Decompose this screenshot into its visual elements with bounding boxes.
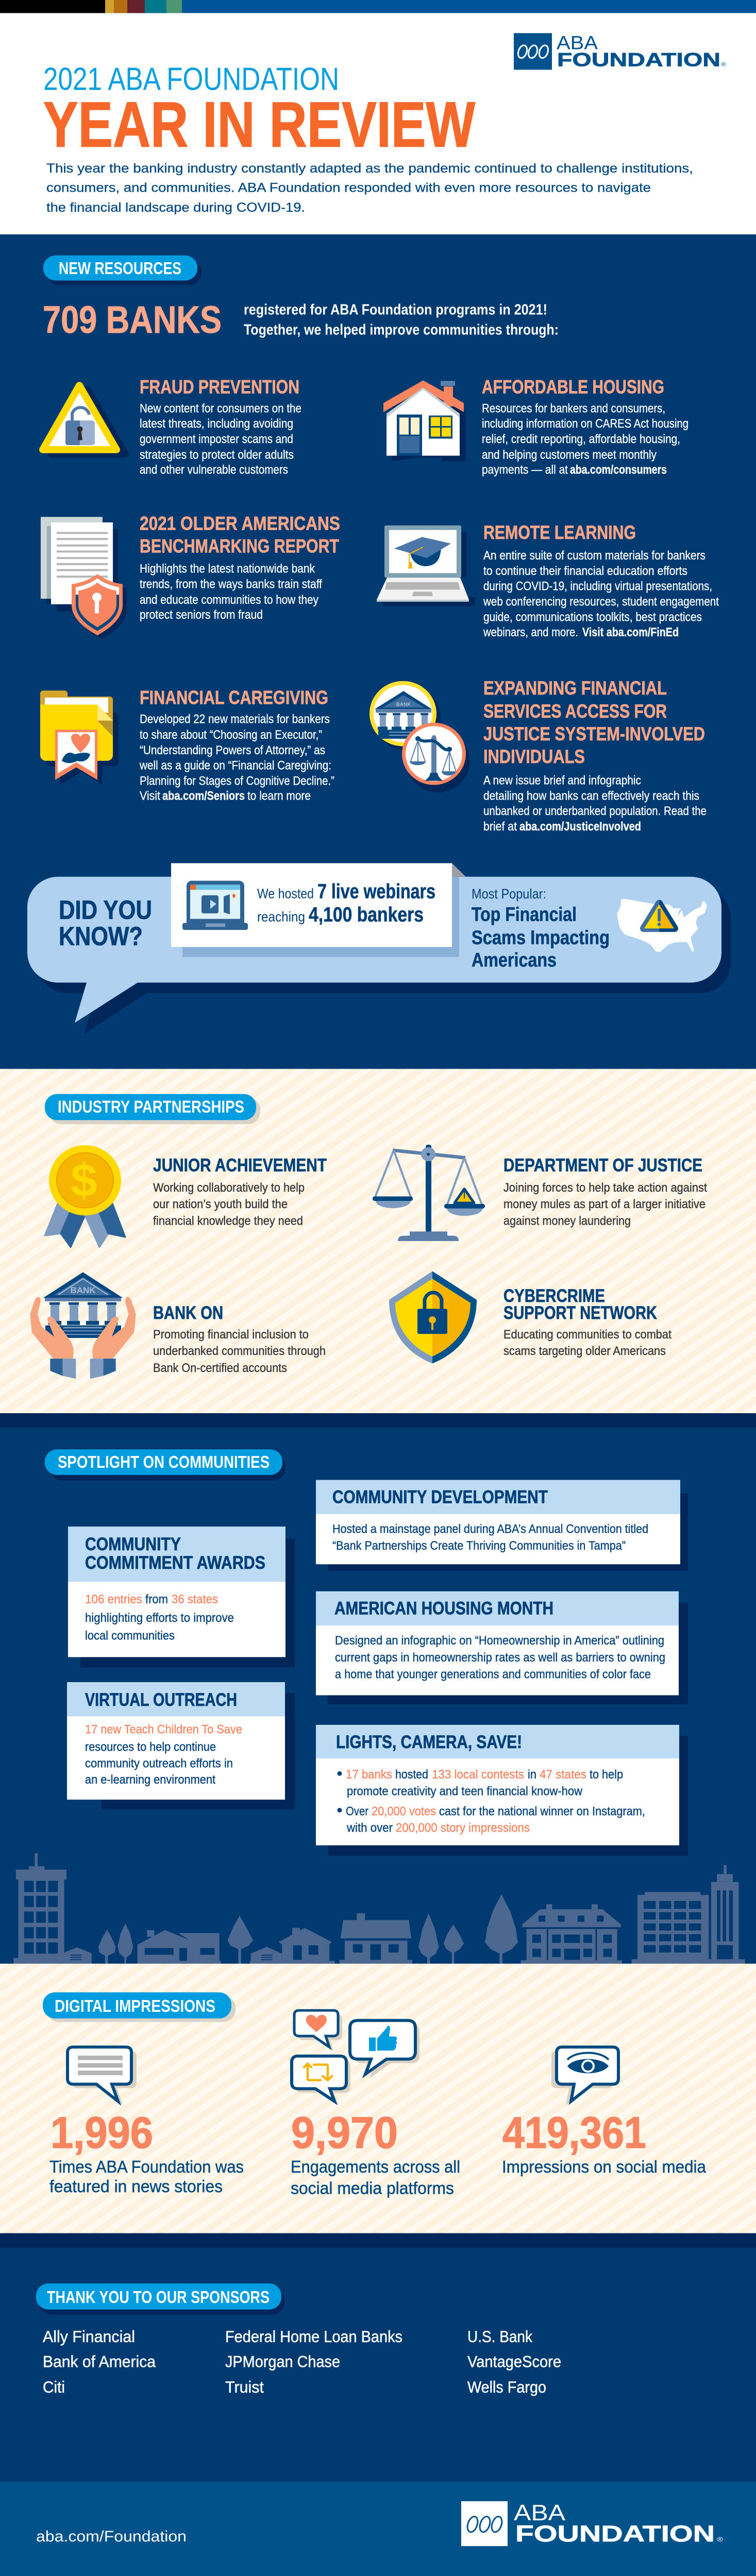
- sponsor list: U.S. Bank: [467, 2327, 532, 2346]
- block: benchmarking report: Highlights the latest nationwide bank: [140, 562, 315, 575]
- block: expanding financial services: [483, 677, 707, 834]
- block: affordable housing: aba.com/consumers: [570, 463, 667, 477]
- block: expanding financial services: unbanked or underbanked population. Read the: [483, 804, 707, 818]
- card: american housing month: current gaps in homeownership rates as well as barriers to owning: [335, 1651, 665, 1665]
- block: financial caregiving: [139, 687, 334, 803]
- card: community commitment awards: local communities: [85, 1629, 175, 1642]
- card: lights, camera, save: Over: [346, 1805, 368, 1818]
- card: virtual outreach: [67, 1682, 295, 1809]
- card: lights, camera, save: cast for the national winner on Instagram,: [439, 1805, 645, 1818]
- section pill: industry partnerships: INDUSTRY PARTNERSHIPS: [58, 1098, 244, 1116]
- block: department of justice: Joining forces to help take action against: [503, 1181, 707, 1195]
- block: affordable housing: Resources for bankers and consumers,: [482, 402, 665, 416]
- block: cybercrime support network: CYBERCRIME: [503, 1285, 605, 1306]
- block: financial caregiving: aba.com/Seniors: [162, 789, 245, 803]
- card: lights, camera, save: 20,000 votes: [372, 1805, 436, 1818]
- icon: report and shield: [41, 517, 127, 639]
- block: expanding financial services: SERVICES ACCESS FOR: [483, 700, 667, 722]
- block: benchmarking report: 2021 OLDER AMERICANS: [140, 513, 340, 534]
- block: financial caregiving: Visit: [140, 789, 160, 803]
- card: lights, camera, save: with over: [346, 1821, 393, 1835]
- sponsor list: Truist: [225, 2378, 264, 2396]
- card: lights, camera, save: promote creativity and teen financial know-how: [347, 1785, 582, 1798]
- block: bank on: BANK ON: [153, 1302, 223, 1323]
- block: expanding financial services: aba.com/JusticeInvolved: [519, 820, 641, 834]
- section pill: sponsors: THANK YOU TO OUR SPONSORS: [47, 2288, 270, 2307]
- sponsor list: Wells Fargo: [467, 2378, 546, 2396]
- card: american housing month: AMERICAN HOUSING MONTH: [334, 1598, 553, 1619]
- block: cybercrime support network: SUPPORT NETWORK: [503, 1302, 657, 1323]
- icon: eye speech bubble: [551, 2047, 618, 2105]
- block: financial caregiving: Planning for Stages of Cognitive Decline.”: [140, 774, 334, 788]
- card: american housing month: Designed an infographic on “Homeownership in America” outlining: [335, 1634, 664, 1648]
- icon: social media bubbles: [292, 2010, 419, 2105]
- stat: engagements: Engagements across all: [291, 2158, 460, 2177]
- section pill: sponsors: [36, 2283, 284, 2314]
- block: junior achievement: Working collaboratively to help: [153, 1181, 305, 1195]
- block: remote learning: REMOTE LEARNING: [483, 522, 636, 543]
- block: remote learning: during COVID-19, including virtual presentations,: [483, 580, 712, 593]
- footer logo: ®: [717, 2536, 723, 2543]
- block: junior achievement: our nation’s youth build the: [153, 1197, 288, 1211]
- block: affordable housing: [482, 376, 688, 477]
- icon: webinar laptop: [182, 881, 248, 930]
- block: remote learning: to continue their financial education efforts: [483, 564, 687, 578]
- block: bank on: underbanked communities through: [153, 1344, 326, 1358]
- block: affordable housing: relief, credit reporting, affordable housing,: [482, 432, 680, 446]
- block: bank on: [153, 1302, 326, 1375]
- callout: did you know: [27, 863, 731, 1034]
- block: department of justice: [503, 1155, 707, 1228]
- block: junior achievement: [153, 1155, 327, 1228]
- intro paragraph: the financial landscape during COVID-19.: [46, 200, 305, 215]
- icon: bank in hands: BANK: [70, 1285, 96, 1295]
- block: benchmarking report: and educate communities to how they: [140, 593, 319, 607]
- stat: impressions: [502, 2107, 706, 2177]
- block: expanding financial services: detailing how banks can effectively reach this: [483, 789, 699, 803]
- stat: engagements: [291, 2107, 460, 2198]
- card: community commitment awards: from: [145, 1592, 168, 1606]
- card: lights, camera, save: [316, 1725, 688, 1856]
- stat: impressions: 419,361: [502, 2107, 646, 2158]
- card: community commitment awards: 36 states: [172, 1592, 218, 1606]
- icon: folder with caregiving ribbon: [40, 690, 119, 785]
- icon: bank and scales circles: [369, 681, 470, 792]
- icon: house: [383, 380, 466, 461]
- card: community development: [316, 1480, 688, 1571]
- icon: news speech bubble: [68, 2047, 137, 2105]
- webinar stats text: reaching: [257, 909, 305, 924]
- sponsor list: [43, 2327, 561, 2396]
- block: department of justice: against money laundering: [503, 1214, 631, 1228]
- block: financial caregiving: to share about “Choosing an Executor,”: [140, 728, 322, 742]
- icon: US map with warning: [617, 899, 707, 952]
- registered text: [244, 302, 559, 338]
- webinar stats text: 4,100 bankers: [309, 903, 424, 926]
- section pill: digital impressions: [43, 1992, 236, 2022]
- card: lights, camera, save: to help: [590, 1768, 623, 1782]
- block: junior achievement: JUNIOR ACHIEVEMENT: [153, 1155, 327, 1175]
- block: cybercrime support network: scams targeting older Americans: [503, 1344, 666, 1358]
- webinars card: [171, 863, 466, 957]
- most popular text: [472, 886, 610, 971]
- block: bank on: Promoting financial inclusion to: [153, 1328, 309, 1342]
- block: financial caregiving: to learn more: [247, 789, 311, 803]
- stat: news stories: [49, 2107, 244, 2196]
- card: virtual outreach: 17 new Teach Children To Save: [85, 1723, 242, 1736]
- stat: engagements: 9,970: [291, 2107, 398, 2158]
- block: affordable housing: payments — all at: [482, 463, 568, 477]
- block: remote learning: An entire suite of custom materials for bankers: [483, 549, 705, 563]
- panel: sponsors: [0, 2233, 756, 2482]
- block: benchmarking report: BENCHMARKING REPORT: [140, 535, 339, 556]
- title: 2021 ABA Foundation: 2021 ABA FOUNDATION: [43, 61, 339, 97]
- block: department of justice: DEPARTMENT OF JUSTICE: [503, 1155, 702, 1175]
- icon: cyber shield: [389, 1271, 477, 1364]
- block: remote learning: guide, communications toolkits, best practices: [483, 611, 702, 624]
- block: fraud prevention: New content for consumers on the: [140, 402, 301, 416]
- most popular text: Most Popular:: [472, 886, 546, 902]
- block: expanding financial services: brief at: [483, 820, 517, 834]
- most popular text: Americans: [472, 950, 557, 971]
- block: cybercrime support network: Educating communities to combat: [503, 1328, 671, 1342]
- panel: spotlight on communities: [0, 1413, 756, 1964]
- card: community commitment awards: 106 entries: [85, 1592, 142, 1606]
- card: community commitment awards: COMMITMENT AWARDS: [85, 1552, 265, 1573]
- block: fraud prevention: strategies to protect older adults: [140, 448, 294, 462]
- section pill: digital impressions: DIGITAL IMPRESSIONS: [55, 1997, 215, 2016]
- registered text: registered for ABA Foundation programs in 2021!: [244, 302, 547, 318]
- illustration: town skyline: [13, 1853, 745, 1964]
- card: lights, camera, save: hosted: [395, 1768, 428, 1782]
- block: fraud prevention: and other vulnerable customers: [140, 463, 288, 477]
- block: affordable housing: including information on CARES Act housing: [482, 417, 688, 431]
- card: lights, camera, save: 47 states: [540, 1768, 586, 1782]
- card: lights, camera, save: 133 local contests: [432, 1768, 524, 1782]
- did you know heading: [59, 895, 152, 951]
- most popular text: Scams Impacting: [472, 927, 610, 948]
- panel: industry partnerships: [0, 1069, 756, 1413]
- block: financial caregiving: Developed 22 new materials for bankers: [140, 713, 330, 726]
- webinar stats text: We hosted: [257, 886, 314, 902]
- webinar stats text: [257, 879, 435, 926]
- card: lights, camera, save: LIGHTS, CAMERA, SAVE!: [336, 1732, 522, 1752]
- block: expanding financial services: INDIVIDUALS: [483, 746, 585, 767]
- icon: scales with warning: [373, 1145, 485, 1241]
- icon: bank in hands: [30, 1272, 136, 1379]
- block: cybercrime support network: [503, 1285, 671, 1358]
- card: virtual outreach: VIRTUAL OUTREACH: [85, 1689, 237, 1710]
- sponsor list: JPMorgan Chase: [225, 2352, 340, 2370]
- footer logo: FOUNDATION: [515, 2520, 715, 2547]
- block: benchmarking report: [140, 513, 340, 622]
- logo: ABA Foundation: FOUNDATION: [557, 49, 720, 70]
- icon: warning padlock: [43, 385, 125, 454]
- card: lights, camera, save: 17 banks: [346, 1768, 392, 1782]
- footer: [0, 2482, 756, 2576]
- block: fraud prevention: FRAUD PREVENTION: [140, 376, 299, 398]
- stat: news stories: 1,996: [51, 2107, 153, 2158]
- block: remote learning: [483, 522, 719, 639]
- logo: ABA Foundation: ®: [721, 62, 726, 68]
- card: virtual outreach: community outreach efforts in: [85, 1757, 233, 1771]
- icon: laptop with graduation cap: [377, 526, 475, 606]
- icon: medal: $: [71, 1155, 97, 1207]
- block: fraud prevention: latest threats, including avoiding: [140, 417, 293, 431]
- sponsor list: Bank of America: [43, 2352, 156, 2370]
- card: community development: COMMUNITY DEVELOPMENT: [332, 1487, 548, 1507]
- block: financial caregiving: well as a guide on “Financial Caregiving:: [139, 759, 331, 772]
- block: junior achievement: financial knowledge they need: [153, 1214, 303, 1228]
- sponsor list: VantageScore: [467, 2352, 561, 2370]
- panel: digital impressions: [0, 1964, 756, 2233]
- block: affordable housing: and helping customers meet monthly: [482, 448, 657, 462]
- logo: ABA Foundation: ABA: [557, 32, 598, 53]
- intro paragraph: [46, 161, 693, 215]
- intro paragraph: consumers, and communities. ABA Foundation responded with even more resources to navigate: [46, 181, 651, 195]
- card: american housing month: a home that younger generations and communities of color face: [335, 1668, 651, 1681]
- block: bank on: Bank On-certified accounts: [153, 1361, 287, 1375]
- stat: impressions: Impressions on social media: [502, 2158, 706, 2177]
- block: financial caregiving: “Understanding Powers of Attorney,” as: [140, 743, 325, 757]
- card: community commitment awards: highlighting efforts to improve: [85, 1612, 234, 1625]
- card: virtual outreach: resources to help continue: [85, 1740, 216, 1754]
- block: expanding financial services: EXPANDING FINANCIAL: [483, 677, 667, 699]
- section pill: industry partnerships: [45, 1094, 260, 1124]
- most popular text: Top Financial: [472, 904, 577, 925]
- block: fraud prevention: [140, 376, 301, 477]
- top colour bar: [0, 0, 756, 13]
- footer logo: [461, 2500, 723, 2547]
- stat: 709 banks: 709 BANKS: [43, 298, 222, 341]
- section pill: new resources: [43, 256, 201, 285]
- logo: ABA Foundation: [514, 32, 726, 70]
- card: community development: “Bank Partnerships Create Thriving Communities in Tampa”: [332, 1539, 626, 1553]
- did you know heading: DID YOU: [59, 895, 152, 924]
- stat: news stories: featured in news stories: [49, 2177, 223, 2196]
- footer logo: ABA: [514, 2500, 565, 2526]
- title: Year in Review: YEAR IN REVIEW: [43, 89, 476, 160]
- did you know heading: KNOW?: [59, 922, 143, 951]
- intro paragraph: This year the banking industry constantly adapted as the pandemic continued to challenge institutions,: [46, 161, 693, 176]
- card: community development: Hosted a mainstage panel during ABA’s Annual Convention titled: [332, 1522, 648, 1536]
- block: remote learning: webinars, and more.: [483, 625, 578, 639]
- card: community commitment awards: COMMUNITY: [85, 1534, 181, 1554]
- stat: engagements: social media platforms: [291, 2179, 454, 2198]
- icon: bank and scales circles: BANK: [396, 702, 411, 708]
- section pill: spotlight: SPOTLIGHT ON COMMUNITIES: [58, 1453, 270, 1472]
- block: remote learning: Visit aba.com/FinEd: [582, 625, 679, 639]
- icon: medal: [45, 1145, 125, 1247]
- block: fraud prevention: government imposter scams and: [140, 432, 293, 446]
- block: benchmarking report: protect seniors from fraud: [140, 608, 263, 622]
- stat: news stories: Times ABA Foundation was: [49, 2158, 244, 2177]
- card: lights, camera, save: in: [528, 1768, 536, 1782]
- block: expanding financial services: A new issue brief and infographic: [483, 774, 641, 787]
- section pill: new resources: NEW RESOURCES: [59, 259, 181, 278]
- block: benchmarking report: trends, from the ways banks train staff: [140, 578, 322, 591]
- block: financial caregiving: FINANCIAL CAREGIVING: [140, 687, 328, 708]
- card: community commitment awards: [68, 1527, 295, 1668]
- webinar stats text: 7 live webinars: [317, 879, 435, 903]
- sponsor list: Federal Home Loan Banks: [225, 2327, 402, 2346]
- panel: new resources: [0, 234, 756, 1069]
- registered text: Together, we helped improve communities through:: [244, 322, 559, 338]
- sponsor list: Citi: [43, 2378, 65, 2396]
- card: lights, camera, save: 200,000 story impressions: [396, 1821, 530, 1835]
- block: department of justice: money mules as part of a larger initiative: [503, 1197, 705, 1211]
- block: expanding financial services: JUSTICE SYSTEM-INVOLVED: [483, 723, 705, 744]
- card: american housing month: [316, 1591, 688, 1704]
- section pill: spotlight: [45, 1449, 285, 1481]
- sponsor list: Ally Financial: [43, 2327, 135, 2346]
- footer url: aba.com/Foundation: [36, 2528, 187, 2545]
- card: virtual outreach: an e-learning environment: [85, 1773, 215, 1787]
- block: affordable housing: AFFORDABLE HOUSING: [482, 376, 664, 398]
